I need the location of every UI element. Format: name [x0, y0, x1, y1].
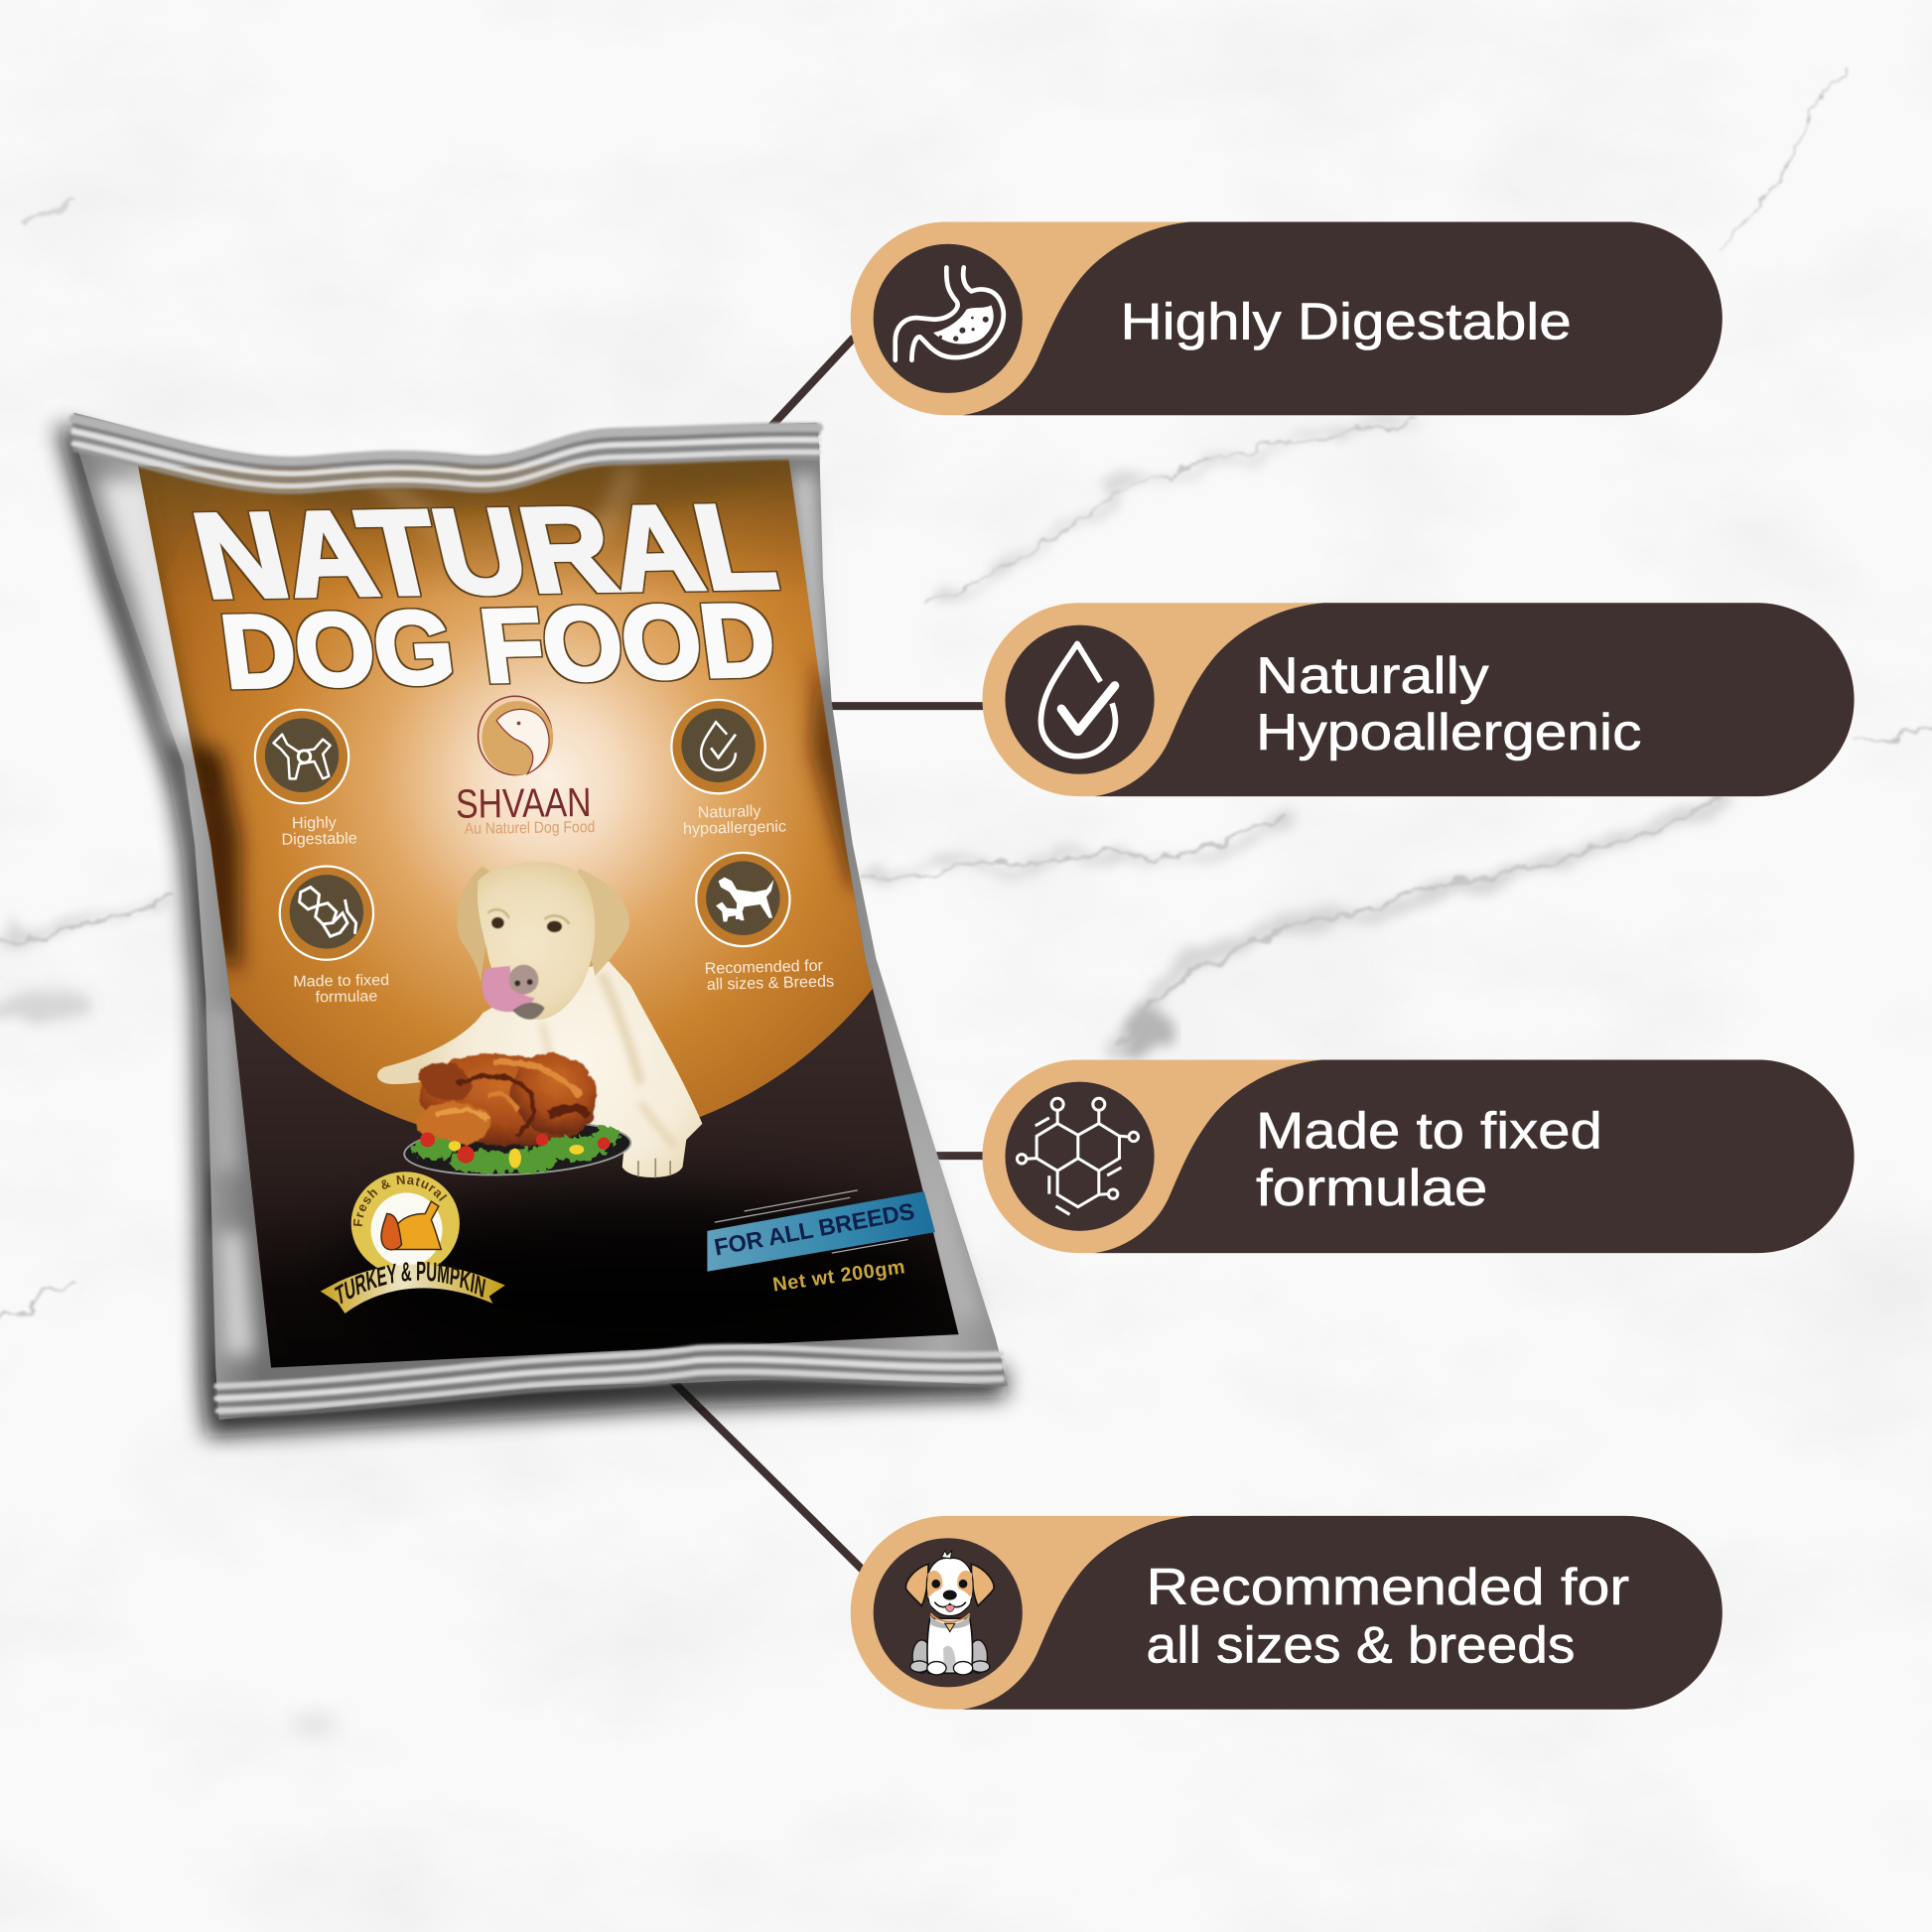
- bag badge: all sizes: Recomended for: [705, 957, 824, 978]
- label: Highly Digestable: [1121, 293, 1572, 350]
- net weight: Net wt 200gm: [771, 1256, 906, 1297]
- bag title: NATURAL DOG FOOD: DOG FOOD: [214, 582, 781, 710]
- icon: molecule: [1017, 1098, 1138, 1214]
- bag title: NATURAL DOG FOOD: [182, 480, 787, 710]
- brand logo: SHVAAN: SHVAAN: [456, 779, 592, 827]
- bag body: [73, 413, 1008, 1420]
- bag badge: fixed formulae: formulae: [315, 987, 377, 1006]
- seal crimps: [73, 419, 1003, 1417]
- for all breeds banner: FOR ALL BREEDS: [712, 1198, 916, 1261]
- bag badge: fixed formulae: [280, 866, 390, 1007]
- feature pill: highly digestable: [851, 221, 1723, 415]
- dog body shading: [542, 973, 675, 1146]
- bag badge: highly digestable: Digestable: [281, 829, 357, 849]
- label: Made to fixed: [1256, 1103, 1602, 1161]
- bag badge: highly digestable: Highly: [292, 814, 338, 832]
- feature pill: naturally hypoallergenic: [983, 603, 1855, 796]
- dog ears: [457, 866, 501, 982]
- icon: drop with check: [1040, 643, 1115, 757]
- bag badge: fixed formulae: Made to fixed: [293, 971, 389, 991]
- bag title: NATURAL DOG FOOD: NATURAL: [182, 480, 787, 624]
- connector lines: [671, 338, 985, 1573]
- bag badge: all sizes: [696, 853, 834, 994]
- dog face: [483, 909, 569, 1020]
- orange circle: [161, 461, 873, 1124]
- icon: stomach: [896, 267, 1004, 360]
- brand logo: SHVAAN: [456, 696, 595, 838]
- bag shadow: [57, 425, 1006, 1437]
- feature pill: recommended for all sizes and breeds: all sizes & breeds: [1147, 1617, 1575, 1675]
- bag badge: hypoallergenic: hypoallergenic: [683, 817, 786, 838]
- product bag: [44, 411, 1023, 1453]
- bag badge: all sizes: all sizes & Breeds: [707, 972, 834, 994]
- ribbon: [321, 1264, 505, 1313]
- bag badge: hypoallergenic: [671, 700, 786, 838]
- turkey icon: [392, 1201, 441, 1249]
- bottom label shading: [333, 1195, 949, 1368]
- feature pill: made to fixed formulae: [983, 1059, 1855, 1253]
- roast turkey on plate: [403, 1037, 632, 1180]
- bag sheen highlights: [86, 456, 980, 1355]
- dog head: [478, 862, 595, 1020]
- label: Recommended for: [1147, 1559, 1629, 1616]
- bag badge: hypoallergenic: Naturally: [698, 802, 762, 822]
- bag badge: highly digestable: [255, 710, 357, 849]
- dog body: [377, 961, 702, 1177]
- brand logo: SHVAAN: Au Naturel Dog Food: [465, 818, 595, 838]
- flavour badge: turkey and pumpkin: [320, 1160, 509, 1313]
- flavour badge: turkey and pumpkin: TURKEY & PUMPKIN: [335, 1261, 486, 1305]
- feature pill: recommended for all sizes and breeds: [851, 1516, 1723, 1710]
- flavour badge: turkey and pumpkin: Fresh & Natural: [353, 1175, 447, 1227]
- dog illustration: [377, 862, 702, 1177]
- label: Naturally: [1256, 647, 1489, 705]
- printed label: [138, 459, 959, 1368]
- icon: puppy: [905, 1551, 994, 1675]
- feature pill: made to fixed formulae: formulae: [1256, 1160, 1487, 1217]
- for all breeds banner: [707, 1190, 935, 1272]
- feature pill: naturally hypoallergenic: Hypoallergenic: [1256, 704, 1641, 761]
- label edge shading: [136, 456, 869, 973]
